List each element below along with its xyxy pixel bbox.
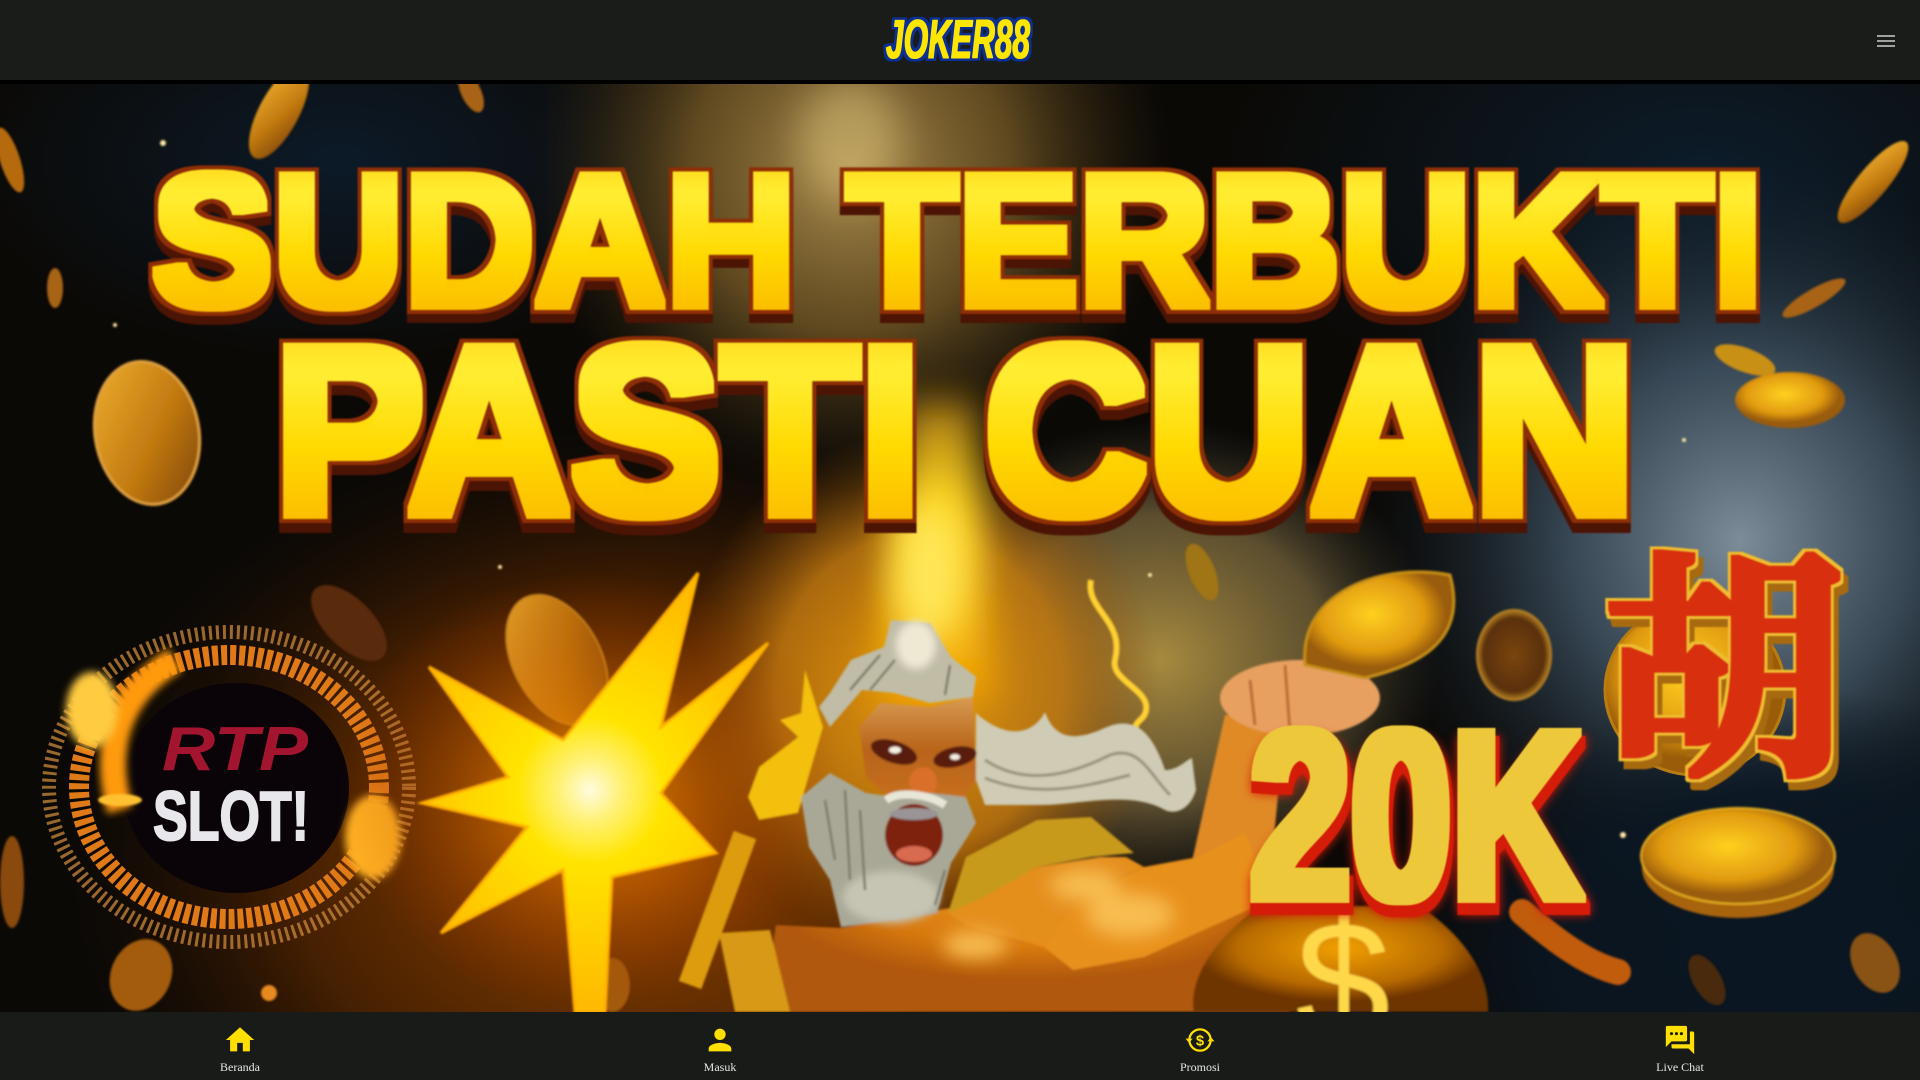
header bar xyxy=(0,0,1920,80)
flowing hair xyxy=(976,712,1196,812)
fist xyxy=(1220,660,1380,736)
lower arm xyxy=(1044,833,1270,970)
Zeus figure xyxy=(690,572,1454,1012)
hu token: 胡 xyxy=(1605,541,1845,807)
lightning bolt xyxy=(1090,580,1146,730)
nav item: Promosi xyxy=(1180,1028,1220,1074)
icon: dollar cycle: $ xyxy=(1196,1033,1205,1049)
crest hair xyxy=(819,620,976,727)
nav item: Beranda xyxy=(220,1027,260,1074)
nav item: Live Chat xyxy=(1656,1026,1704,1074)
headline: SUDAH TERBUKTI xyxy=(152,136,1763,345)
RTP SLOT badge xyxy=(49,632,409,942)
icon: home xyxy=(226,1027,254,1052)
lightning star and staff xyxy=(340,570,840,1012)
upper arm xyxy=(948,857,1144,947)
flame hair xyxy=(748,670,823,820)
gold staff band xyxy=(690,835,745,985)
icon: person xyxy=(708,1028,732,1052)
skin highlights xyxy=(943,869,1174,959)
nav item: Masuk: Masuk xyxy=(704,1060,736,1074)
nav item: Promosi: Promosi xyxy=(1180,1060,1220,1074)
mouth xyxy=(885,804,943,866)
sparks xyxy=(113,140,1686,1001)
beard xyxy=(801,773,976,927)
nav item: Beranda: Beranda xyxy=(220,1060,260,1074)
gold drape xyxy=(948,817,1134,913)
20K prize: 20K xyxy=(1250,680,1582,951)
nose xyxy=(909,767,937,797)
headline: PASTI CUAN xyxy=(274,297,1636,564)
bottom navigation xyxy=(0,1012,1920,1080)
RTP text: RTP xyxy=(162,715,309,784)
gold ingot xyxy=(1305,572,1454,678)
icon: hamburger menu xyxy=(1877,35,1895,47)
chest xyxy=(773,850,1290,1012)
gold coin bottom right xyxy=(1641,808,1835,918)
SLOT text: SLOT! xyxy=(153,777,309,855)
eyes xyxy=(868,734,979,771)
face xyxy=(859,697,976,803)
nav item: Masuk xyxy=(704,1028,736,1074)
nav item: Live Chat: Live Chat xyxy=(1656,1060,1704,1074)
money bag xyxy=(1193,887,1618,1077)
icon: chat bubbles xyxy=(1666,1026,1694,1054)
icon: dollar cycle xyxy=(1186,1028,1214,1052)
gold sash xyxy=(719,930,790,1012)
forearm xyxy=(1190,715,1285,880)
headline xyxy=(152,136,1763,564)
